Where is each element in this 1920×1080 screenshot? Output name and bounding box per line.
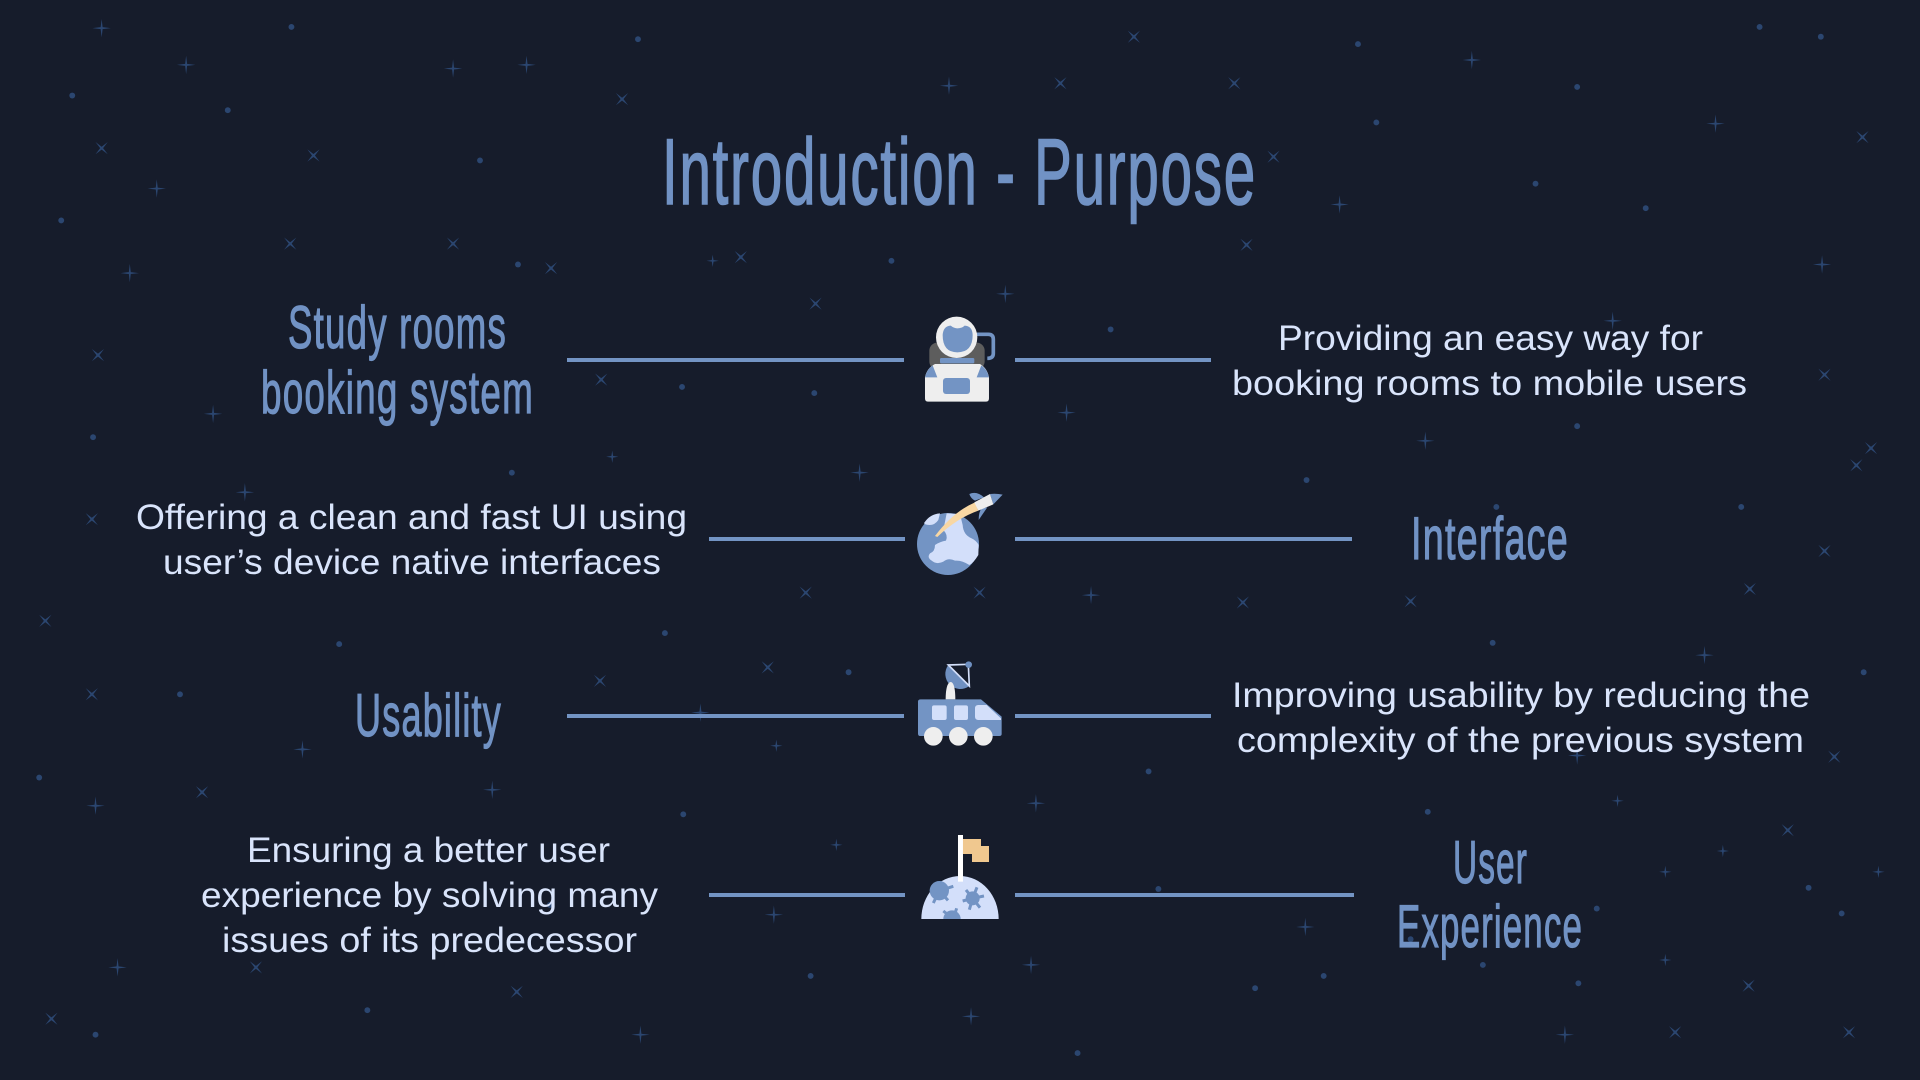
connector right bbox=[1015, 358, 1211, 362]
icon: moon with flag bbox=[921, 835, 999, 919]
heading: interface: Interface bbox=[1411, 505, 1569, 572]
description: booking rooms bbox=[1232, 319, 1747, 403]
row 2: interface bbox=[136, 493, 1569, 582]
heading: user experience: User bbox=[1453, 829, 1528, 896]
description: improving usability: Improving usability by reducing the bbox=[1232, 676, 1810, 715]
heading: study rooms booking system bbox=[261, 294, 534, 426]
heading: study rooms booking system: booking system bbox=[261, 359, 534, 426]
connector left bbox=[567, 714, 904, 718]
connector right bbox=[1015, 537, 1352, 541]
description: clean and fast UI: Offering a clean and fast UI using bbox=[136, 498, 687, 537]
description: better user experience: Ensuring a better user bbox=[247, 831, 610, 870]
description: clean and fast UI: user’s device native interfaces bbox=[163, 543, 661, 582]
connector left bbox=[709, 537, 905, 541]
heading: user experience bbox=[1397, 829, 1583, 960]
description: better user experience bbox=[201, 831, 659, 960]
title: Introduction - Purpose bbox=[662, 119, 1257, 224]
row 3: usability bbox=[355, 661, 1810, 760]
description: better user experience: experience by solving many bbox=[201, 876, 659, 915]
connector left bbox=[567, 358, 904, 362]
heading: study rooms booking system: Study rooms bbox=[288, 294, 507, 361]
row 4: user experience bbox=[201, 829, 1583, 960]
row 1: study rooms bbox=[261, 294, 1747, 426]
description: improving usability bbox=[1232, 676, 1810, 760]
connector right bbox=[1015, 893, 1354, 897]
icon: rover with dish bbox=[918, 661, 1002, 746]
icon: globe with rocket bbox=[917, 493, 1003, 575]
heading: user experience: Experience bbox=[1397, 893, 1583, 960]
connector left bbox=[709, 893, 905, 897]
description: improving usability: complexity of the previous system bbox=[1237, 721, 1804, 760]
connector right bbox=[1015, 714, 1211, 718]
description: booking rooms: Providing an easy way for bbox=[1278, 319, 1703, 358]
description: clean and fast UI bbox=[136, 498, 687, 582]
description: booking rooms: booking rooms to mobile users bbox=[1232, 364, 1747, 403]
heading: usability: Usability bbox=[355, 682, 502, 749]
icon: astronaut bbox=[925, 317, 993, 402]
description: better user experience: issues of its predecessor bbox=[222, 921, 637, 960]
